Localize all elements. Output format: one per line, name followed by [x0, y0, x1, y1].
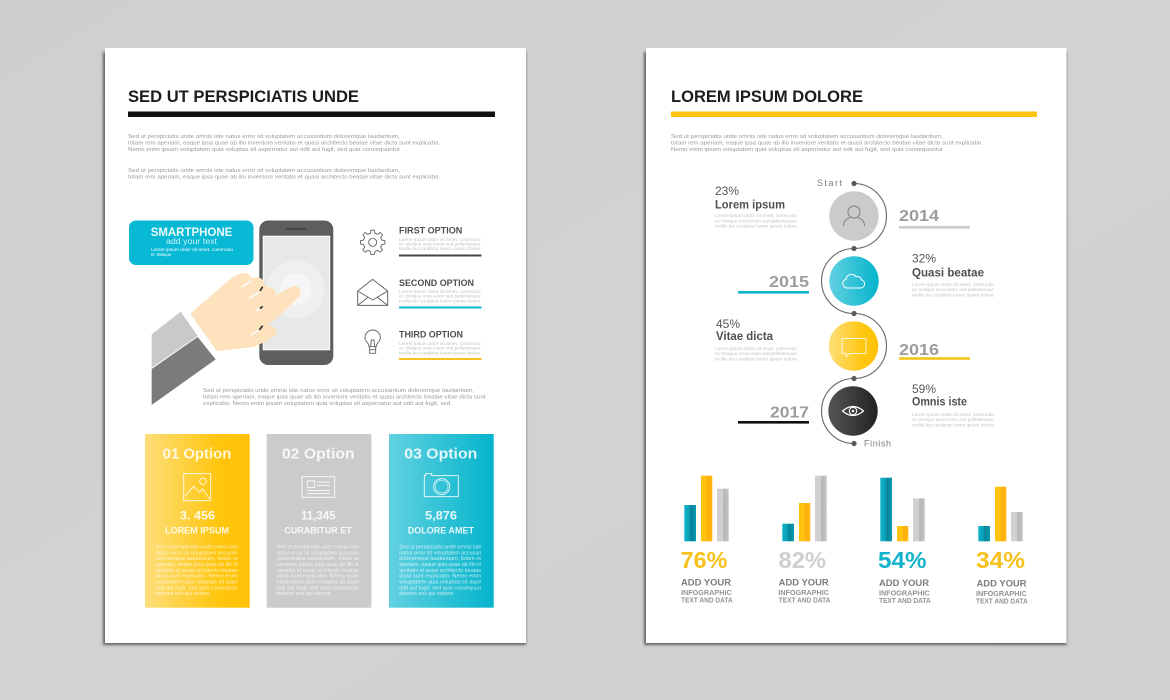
- option: second: Lorem ipsum dolor sit amet, commodo: [399, 289, 481, 294]
- option: first: Lorem ipsum dolor sit amet, commodo: [399, 237, 481, 242]
- callout: 23% lorem ipsum: mollis leo curabitur lorem ipsum dolore: [715, 224, 798, 228]
- bar chart: 82%: ADD YOUR: [779, 578, 829, 588]
- callout: 23% lorem ipsum: et, tristique urna lorem sed pellentesque: [715, 218, 798, 223]
- bar chart: 82%: [778, 476, 830, 605]
- year: 2015: 2015: [769, 274, 809, 291]
- option: second: [399, 278, 482, 308]
- callout: 45% vitae dicta: [715, 319, 798, 361]
- bar chart: 82%: 82%: [778, 547, 826, 573]
- label: start: Start: [817, 178, 842, 188]
- panel: 01 option: voluptatem quia voluptas sit aspe: [156, 580, 238, 586]
- panel: 01 option: Sed ut perspiciatis unde omnis iste: [156, 544, 238, 550]
- text block: intro: Sed ut perspiciatis unde omnis iste natus error sit voluptatem accusantium doloremque laudantium,: [128, 168, 400, 174]
- text block: intro: totam rem aperiam, eaque ipsa quae ab illo inventore veritatis et quasi architecto beatae vitae dicta sunt explicabo.: [128, 141, 440, 147]
- bar chart: 54%: INFOGRAPHIC: [879, 590, 930, 597]
- callout: 45% vitae dicta: et, tristique urna lorem sed pellentesque: [715, 351, 798, 356]
- callout: 45% vitae dicta: 45%: [716, 319, 740, 331]
- panel: 01 option: [145, 434, 250, 608]
- text block: mid paragraph: totam rem aperiam, eaque ipsa quae ab illo inventore veritatis et quasi architecto beatae vitae dicta sunt: [203, 394, 486, 400]
- callout: 32% quasi beatae: mollis leo curabitur lorem ipsum dolore: [912, 292, 995, 297]
- panel: 01 option: veritatis et quasi architecto beatae: [156, 568, 238, 574]
- icon: smartphone: [259, 220, 333, 365]
- callout: 45% vitae dicta: Vitae dicta: [716, 331, 774, 343]
- text block: right intro: Nemo enim ipsam voluptatem quia voluptas sit aspernatur aut odit aut fugit, sed quia consequuntur: [671, 147, 943, 153]
- text block: mid paragraph: Sed ut perspiciatis unde omnis iste natus error sit voluptatem accusantium doloremque laudantium,: [203, 388, 474, 394]
- option: third: et, tristique urna lorem sed pellentesque: [399, 346, 481, 351]
- year: 2016: 2016: [899, 342, 939, 359]
- option: second: et, tristique urna lorem sed pellentesque: [399, 294, 481, 299]
- heading: left page: SED UT PERSPICIATIS UNDE: [128, 87, 359, 106]
- panel: 01 option: 01 Option: [163, 446, 231, 462]
- year: 2016: [899, 342, 970, 360]
- text block: intro: [128, 134, 440, 181]
- icon: light bulb: [365, 330, 380, 353]
- callout: 45% vitae dicta: Lorem ipsum dolor sit amet, commodo: [715, 346, 798, 351]
- callout: 23% lorem ipsum: Lorem ipsum dolor sit amet, commodo: [715, 213, 798, 218]
- callout: 59% omnis iste: et, tristique urna lorem sed pellentesque: [912, 417, 995, 422]
- option: first: FIRST OPTION: [399, 226, 462, 236]
- panel: 03 option: dolores eos qui ratione: [399, 591, 454, 597]
- year: 2017: 2017: [770, 405, 809, 422]
- callout: 32% quasi beatae: 32%: [912, 254, 936, 266]
- panel: 03 option: voluptatem quia voluptas sit aspe: [399, 580, 482, 586]
- panel: 03 option: [389, 434, 494, 608]
- panel: 02 option: dolores eos qui ratione: [277, 591, 331, 597]
- bar chart: 76%: TEXT AND DATA: [681, 598, 733, 605]
- bar chart: 34%: 34%: [976, 547, 1025, 573]
- bar chart: 54%: [878, 478, 931, 605]
- panel: 02 option: veritatis et quasi architecto beatae: [277, 568, 359, 574]
- heading: left page: [128, 87, 495, 117]
- option: first: mollis leo curabitur lorem ipsum dolore: [399, 246, 481, 251]
- panel: 03 option: DOLORE AMET: [408, 525, 474, 535]
- panel: 01 option: odit aut fugit, sed quia consequun: [156, 585, 238, 591]
- callout: smartphone: Lorem ipsum dolor sit amet, commodo: [151, 247, 233, 252]
- callout: smartphone: add your text: [166, 237, 218, 246]
- option: third: Lorem ipsum dolor sit amet, commodo: [399, 341, 481, 346]
- panel: 01 option: natus error sit voluptatem accusan: [156, 550, 238, 556]
- text block: right intro: totam rem aperiam, eaque ipsa quae ab illo inventore veritatis et quasi architecto beatae vitae dicta sunt explicabo.: [671, 141, 983, 147]
- heading: right page: [671, 87, 1037, 117]
- panel: right page: [644, 48, 1066, 645]
- bar chart: 54%: ADD YOUR: [879, 578, 930, 588]
- icon: picture: [184, 474, 211, 501]
- panel: 03 option: odit aut fugit, sed quia consequun: [399, 585, 482, 591]
- icon: gear: [360, 230, 385, 255]
- callout: smartphone: et, tristique: [151, 252, 171, 257]
- bar chart: 34%: TEXT AND DATA: [976, 598, 1028, 606]
- callout: 45% vitae dicta: mollis leo curabitur lorem ipsum dolore: [715, 356, 798, 361]
- year: 2017: [738, 405, 809, 424]
- panel: 03 option: 5,876: [425, 510, 457, 522]
- bar chart: 34%: ADD YOUR: [976, 578, 1027, 588]
- text block: intro: Sed ut perspiciatis unde omnis iste natus error sit voluptatem accusantium doloremque laudantium,: [128, 134, 400, 140]
- year: 2014: 2014: [899, 208, 939, 225]
- panel: 01 option: LOREM IPSUM: [165, 525, 229, 535]
- panel: 01 option: aperiam, eaque ipsa quae ab illo in: [156, 562, 238, 568]
- panel: 03 option: veritatis et quasi architecto beatae: [399, 568, 482, 574]
- panel: 02 option: voluptatem quia voluptas sit aspe: [277, 580, 359, 586]
- callout: smartphone: [129, 220, 254, 265]
- option: second: mollis leo curabitur lorem ipsum dolore: [399, 298, 481, 303]
- bar chart: 76%: INFOGRAPHIC: [681, 590, 732, 597]
- panel: 03 option: aperiam, eaque ipsa quae ab illo in: [399, 562, 482, 568]
- icon: person circle: [829, 191, 879, 241]
- callout: 23% lorem ipsum: Lorem ipsum: [715, 200, 785, 212]
- bar chart: 76%: 76%: [681, 547, 727, 573]
- callout: 59% omnis iste: 59%: [912, 384, 936, 396]
- panel: 02 option: natus error sit voluptatem accusan: [277, 550, 359, 556]
- year: 2014: [899, 208, 970, 229]
- panel: 02 option: dicta sunt explicabo. Nemo enim: [277, 574, 359, 580]
- text block: intro: totam rem aperiam, eaque ipsa quae ab illo inventore veritatis et quasi architecto beatae vitae dicta sunt explicabo.: [128, 175, 440, 181]
- bar chart: 54%: TEXT AND DATA: [879, 598, 931, 605]
- panel: 01 option: doloremque laudantium, totam re: [156, 556, 238, 562]
- panel: 02 option: doloremque laudantium, totam re: [277, 556, 359, 562]
- callout: 23% lorem ipsum: [715, 186, 798, 228]
- year: 2015: [738, 274, 809, 294]
- text block: intro: Nemo enim ipsam voluptatem quia voluptas sit aspernatur aut odit aut fugit, sed quia consequuntur: [128, 147, 400, 153]
- icon: speech bubble circle: [829, 321, 878, 371]
- panel: 02 option: aperiam, eaque ipsa quae ab illo in: [277, 562, 359, 568]
- option: third: THIRD OPTION: [399, 330, 463, 340]
- bar chart: 76%: ADD YOUR: [681, 578, 732, 588]
- callout: 32% quasi beatae: [912, 254, 995, 297]
- panel: 02 option: 11,345: [301, 510, 336, 522]
- callout: 32% quasi beatae: Lorem ipsum dolor sit amet, commodo: [912, 282, 995, 287]
- timeline path: [822, 181, 886, 446]
- panel: 02 option: odit aut fugit, sed quia consequun: [277, 585, 359, 591]
- bar chart: 54%: 54%: [878, 547, 926, 573]
- panel: 02 option: Sed ut perspiciatis unde omnis iste: [277, 544, 359, 550]
- option: second: SECOND OPTION: [399, 278, 474, 288]
- text block: mid paragraph: explicabo. Nemo enim ipsam voluptatem quia voluptas sit aspernatur aut odit aut fugit, sed.: [203, 401, 452, 407]
- panel: 03 option: Sed ut perspiciatis unde omnis iste: [399, 544, 482, 550]
- panel: 02 option: 02 Option: [282, 446, 355, 462]
- panel: 03 option: 03 Option: [404, 446, 477, 462]
- panel: left page: [103, 48, 526, 645]
- panel: 02 option: CURABITUR ET: [284, 525, 352, 535]
- bar chart: 82%: INFOGRAPHIC: [778, 590, 829, 597]
- bar chart: 34%: INFOGRAPHIC: [976, 591, 1027, 598]
- icon: hand touching screen: [152, 274, 300, 405]
- left page sheet: [103, 48, 526, 645]
- bar chart: 82%: TEXT AND DATA: [779, 598, 830, 605]
- right page sheet: [644, 48, 1066, 645]
- callout: 59% omnis iste: mollis leo curabitur lorem ipsum dolore: [912, 422, 995, 427]
- callout: smartphone: SMARTPHONE: [151, 227, 233, 239]
- icon: eye circle: [828, 386, 878, 436]
- panel: 02 option: [267, 434, 371, 608]
- option: third: mollis leo curabitur lorem ipsum dolore: [399, 350, 481, 355]
- callout: 59% omnis iste: Omnis iste: [912, 397, 967, 409]
- bar chart: 34%: [976, 487, 1028, 606]
- option: first: [399, 226, 482, 256]
- option: first: et, tristique urna lorem sed pellentesque: [399, 242, 481, 246]
- panel: 03 option: dicta sunt explicabo. Nemo enim: [399, 574, 481, 580]
- icon: id card: [302, 477, 335, 497]
- callout: 23% lorem ipsum: 23%: [715, 186, 739, 198]
- panel: 01 option: dicta sunt explicabo. Nemo enim: [156, 574, 238, 580]
- label: finish: Finish: [864, 439, 891, 449]
- callout: 59% omnis iste: Lorem ipsum dolor sit amet, commodo: [912, 412, 995, 417]
- text block: right intro: [671, 134, 983, 153]
- callout: 59% omnis iste: [912, 384, 995, 427]
- bar chart: 76%: [681, 476, 733, 605]
- icon: camera: [424, 474, 458, 497]
- panel: 01 option: dolores eos qui ratione: [156, 591, 210, 597]
- icon: envelope: [358, 279, 388, 305]
- panel: 03 option: doloremque laudantium, totam re: [399, 556, 482, 562]
- panel: 01 option: 3. 456: [180, 510, 215, 522]
- callout: 32% quasi beatae: Quasi beatae: [912, 268, 984, 280]
- callout: 32% quasi beatae: et, tristique urna lorem sed pellentesque: [912, 287, 995, 292]
- text block: right intro: Sed ut perspiciatis unde omnis iste natus error sit voluptatem accusantium doloremque laudantium,: [671, 134, 943, 140]
- icon: cloud circle: [829, 256, 879, 306]
- text block: mid paragraph: [203, 388, 486, 407]
- heading: right page: LOREM IPSUM DOLORE: [671, 87, 863, 106]
- panel: 03 option: natus error sit voluptatem accusan: [399, 550, 482, 556]
- option: third: [399, 330, 482, 360]
